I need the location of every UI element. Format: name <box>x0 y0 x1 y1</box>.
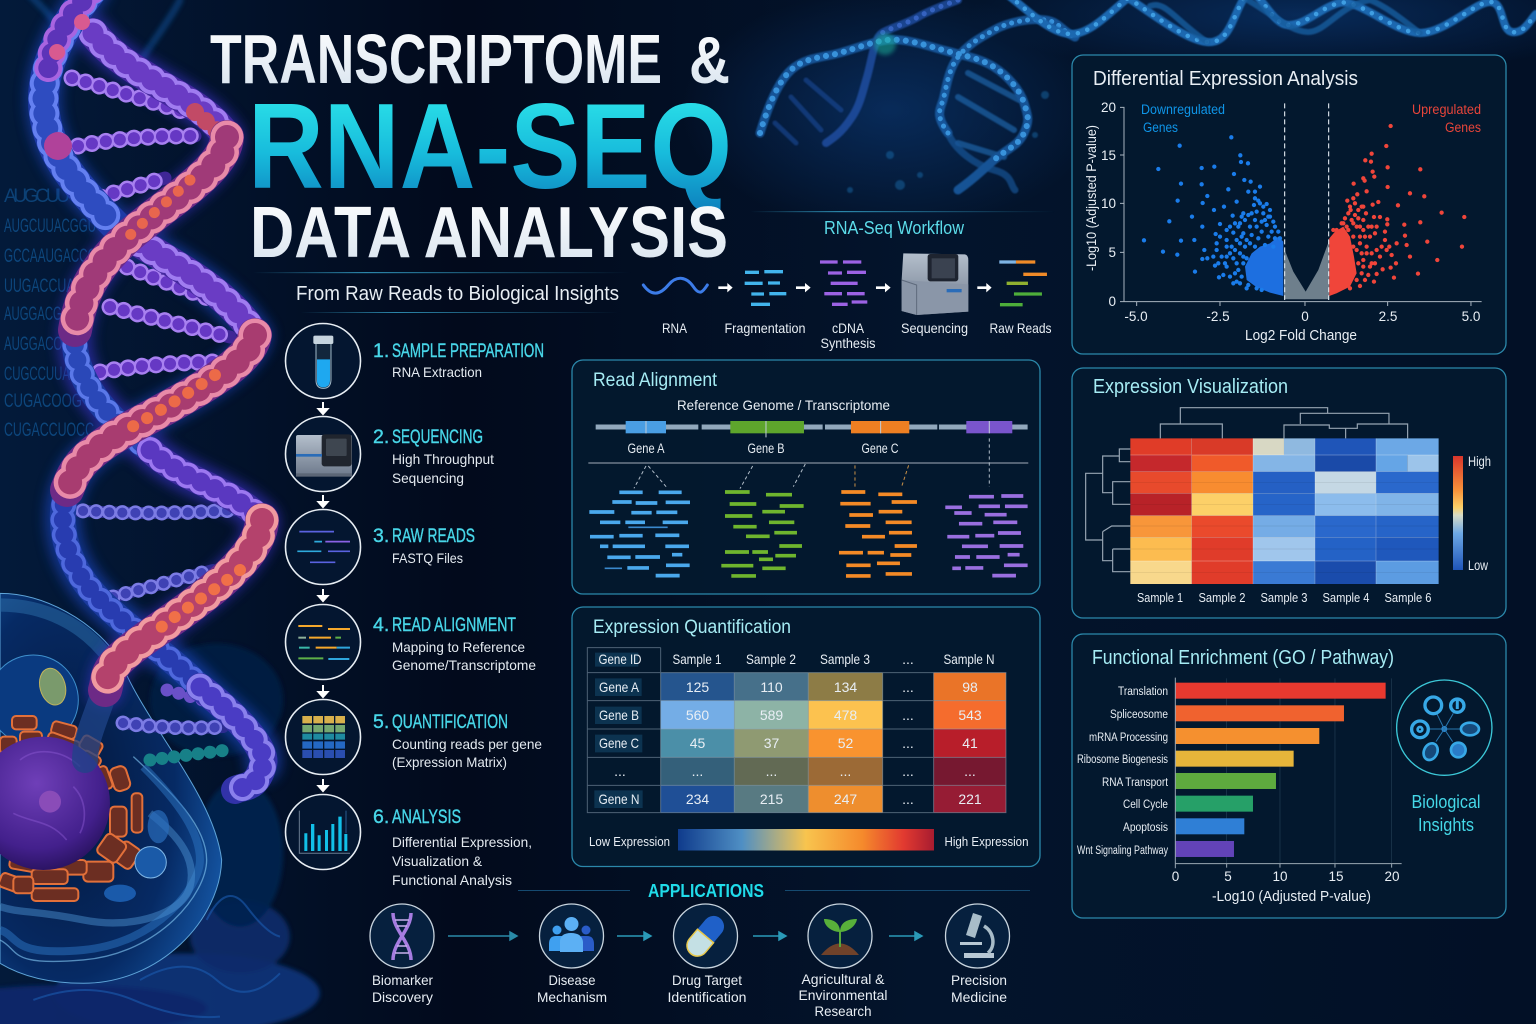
expression table: ... <box>902 791 914 807</box>
step 4: read alignment: READ ALIGNMENT <box>392 614 516 636</box>
step 5: quantification: 5. <box>373 711 389 733</box>
expression table: 125 <box>686 679 709 695</box>
applications <box>370 881 1030 1019</box>
volcano plot <box>1084 100 1482 344</box>
workflow heading: RNA-Seq Workflow <box>824 218 965 238</box>
background: RNA sequence letters: AUGCUUACGGU <box>4 216 96 237</box>
step 2: sequencing: 2. <box>373 426 389 448</box>
panel: read alignment: Gene C <box>862 441 899 456</box>
step 1: sample preparation <box>286 324 544 414</box>
expression table: Gene B <box>599 707 639 723</box>
volcano plot: 10 <box>1101 196 1116 211</box>
panel: read alignment: Gene B <box>748 441 784 456</box>
application: precision medicine: Precision <box>951 972 1007 988</box>
title <box>210 20 732 273</box>
illustration: DNA double helix <box>43 0 264 790</box>
expression table: 560 <box>686 707 709 723</box>
volcano plot: Log2 Fold Change <box>1245 328 1357 344</box>
biological insights label: Insights <box>1418 814 1474 835</box>
bar chart: -Log10 (Adjusted P-value) <box>1212 889 1371 905</box>
arrow <box>753 932 786 940</box>
background: RNA sequence letters: UUGACCUAG <box>4 276 84 297</box>
background: RNA sequence letters: CUGACCUOCC <box>4 420 94 441</box>
application: biomarker discovery: Biomarker <box>372 972 433 988</box>
step 2: sequencing: SEQUENCING <box>392 426 483 448</box>
expression table: Sample N <box>944 651 994 667</box>
step 6: analysis: Differential Expression, <box>392 834 532 850</box>
expression table: 247 <box>834 791 857 807</box>
step 5: quantification: Counting reads per gene <box>392 736 542 752</box>
step 6: analysis <box>286 794 532 888</box>
step 5: quantification <box>286 700 542 791</box>
application: drug target identification <box>668 904 746 1005</box>
panel: differential expression <box>1072 55 1506 354</box>
title: & <box>689 23 730 97</box>
expression table: Gene C <box>599 735 639 751</box>
bar chart <box>1077 678 1402 905</box>
volcano plot: 20 <box>1101 100 1116 115</box>
background: RNA sequence letters: AUGGACGU <box>4 304 70 325</box>
expression table: ... <box>902 707 914 723</box>
expression table: ... <box>902 735 914 751</box>
step 3: raw reads: 3. <box>373 525 389 547</box>
expression table: 110 <box>760 679 783 695</box>
panel: RNA-Seq workflow: cDNA <box>832 320 865 336</box>
expression table: Sample 2 <box>746 651 796 667</box>
step 1: sample preparation: RNA Extraction <box>392 364 482 380</box>
expression table: 221 <box>958 791 982 807</box>
title: DATA ANALYSIS <box>250 193 728 273</box>
panel: RNA-Seq workflow: RNA <box>662 320 688 336</box>
volcano plot: Upregulated <box>1412 102 1481 117</box>
step 3: raw reads: RAW READS <box>392 525 475 547</box>
heatmap: Low <box>1468 558 1488 573</box>
step 3: raw reads <box>286 510 475 601</box>
expression table: 134 <box>834 679 857 695</box>
bar chart: 5 <box>1224 869 1232 884</box>
volcano plot: -5.0 <box>1124 309 1148 324</box>
illustration: cell <box>0 593 320 1024</box>
heatmap: Sample 4 <box>1322 590 1370 605</box>
bar chart: Apoptosis <box>1123 822 1168 834</box>
arrow <box>448 932 517 940</box>
heatmap <box>1086 408 1491 605</box>
front pink strands <box>67 137 262 690</box>
expression table: 45 <box>690 735 705 751</box>
background: faint DNA helices top right <box>30 0 1536 230</box>
expression table: 478 <box>834 707 857 723</box>
title: TRANSCRIPTOME <box>210 20 662 98</box>
step 2: sequencing <box>286 416 494 507</box>
application: biomarker discovery <box>370 904 434 1005</box>
back strand segments <box>63 33 263 790</box>
expression legend: Low Expression <box>589 834 670 849</box>
application: precision medicine: Medicine <box>951 989 1007 1005</box>
heatmap: Sample 6 <box>1384 590 1432 605</box>
step 5: quantification: QUANTIFICATION <box>392 711 508 733</box>
background: RNA sequence letters: CUGACOOG <box>4 391 82 412</box>
expression table: ... <box>902 679 914 695</box>
applications heading: APPLICATIONS <box>648 881 764 901</box>
step 2: sequencing: Sequencing <box>392 470 464 486</box>
expression table: Sample 1 <box>672 651 722 667</box>
panel: read alignment: Reference Genome / Transcriptome <box>677 397 890 413</box>
application: disease mechanism <box>537 904 607 1005</box>
panel: RNA-Seq workflow: Synthesis <box>820 335 876 351</box>
step 4: read alignment: 4. <box>373 614 389 636</box>
enrichment heading: Functional Enrichment (GO / Pathway) <box>1092 647 1394 669</box>
expression table: 52 <box>838 735 853 751</box>
volcano plot: 0 <box>1301 309 1309 324</box>
heatmap: Sample 3 <box>1260 590 1308 605</box>
subtitle: From Raw Reads to Biological Insights <box>296 283 619 305</box>
expression legend <box>589 829 1028 850</box>
volcano heading: Differential Expression Analysis <box>1093 67 1358 90</box>
rungs <box>70 78 235 760</box>
bar chart: Cell Cycle <box>1123 799 1168 811</box>
bar chart: 10 <box>1272 869 1288 884</box>
biological insights label <box>1412 791 1480 835</box>
expression table: Sample 3 <box>820 651 870 667</box>
volcano plot: 5 <box>1108 245 1116 260</box>
expression table: 41 <box>962 735 978 751</box>
expression table: 215 <box>760 791 783 807</box>
background: RNA sequence letters: AUGGACOP <box>4 334 70 355</box>
volcano plot: 0 <box>1108 294 1116 309</box>
step 4: read alignment: Mapping to Reference <box>392 639 525 655</box>
expression table: ... <box>964 763 976 779</box>
step 6: analysis: Functional Analysis <box>392 872 512 888</box>
expression table: ... <box>692 763 703 779</box>
bar chart: Translation <box>1118 686 1168 698</box>
panel: RNA-Seq workflow: Fragmentation <box>724 320 806 336</box>
panel: functional enrichment <box>1072 634 1506 918</box>
volcano plot: Downregulated <box>1141 102 1225 117</box>
step 5: quantification: (Expression Matrix) <box>392 754 507 770</box>
heatmap: High <box>1468 454 1491 469</box>
expression table: ... <box>766 763 777 779</box>
expression table: Gene A <box>599 679 640 695</box>
application: drug target identification: Drug Target <box>672 972 742 988</box>
step 6: analysis: ANALYSIS <box>392 806 461 828</box>
title: RNA-SEQ <box>248 78 732 214</box>
expression table: ... <box>840 763 851 779</box>
expression table: Gene ID <box>598 651 642 667</box>
application: biomarker discovery: Discovery <box>372 989 433 1005</box>
expression table: Gene N <box>598 791 640 807</box>
quantification heading: Expression Quantification <box>593 617 791 638</box>
volcano plot: 15 <box>1101 148 1116 163</box>
application: precision medicine <box>946 904 1010 1005</box>
arrow <box>889 932 922 940</box>
bar chart: 15 <box>1328 869 1344 884</box>
application: disease mechanism: Disease <box>548 972 596 988</box>
step 1: sample preparation: SAMPLE PREPARATION <box>392 340 544 362</box>
panel: RNA-Seq workflow: Raw Reads <box>990 320 1052 336</box>
step 6: analysis: Visualization & <box>392 853 483 869</box>
expression legend: High Expression <box>944 834 1028 849</box>
expression table: 98 <box>962 679 978 695</box>
expression table: 37 <box>764 735 779 751</box>
heatmap: Sample 1 <box>1137 590 1183 605</box>
step 4: read alignment: Genome/Transcriptome <box>392 657 536 673</box>
panel: read alignment: Gene A <box>628 441 664 456</box>
bar chart: Wnt Signaling Pathway <box>1077 845 1168 857</box>
application: agricultural and environmental research: Environmental <box>798 987 888 1003</box>
expression table <box>587 648 1006 813</box>
panel: RNA-Seq workflow <box>643 218 1052 351</box>
colour scale <box>1453 456 1463 570</box>
step 6: analysis: 6. <box>373 806 389 828</box>
step 2: sequencing: High Throughput <box>392 451 494 467</box>
expression table: ... <box>614 763 626 779</box>
volcano plot: 2.5 <box>1379 309 1397 324</box>
background: RNA sequence letters: AUGCUU <box>4 186 70 207</box>
heatmap: Sample 2 <box>1198 590 1246 605</box>
panel: expression visualization <box>1072 368 1506 618</box>
bar chart: 0 <box>1172 869 1179 884</box>
volcano plot: -2.5 <box>1206 309 1230 324</box>
background: RNA sequence letters: CUGCCUUA <box>4 364 70 385</box>
step 4: read alignment <box>286 604 536 697</box>
application: drug target identification: Identification <box>668 989 746 1005</box>
step 1: sample preparation: 1. <box>373 340 389 362</box>
bar chart: RNA Transport <box>1102 777 1169 789</box>
application: agricultural and environmental research <box>798 904 888 1019</box>
bar chart: 20 <box>1384 869 1400 884</box>
application: disease mechanism: Mechanism <box>537 989 607 1005</box>
expression table: 543 <box>958 707 982 723</box>
arrow <box>617 932 651 940</box>
expression table: ... <box>902 763 914 779</box>
bar chart: Spliceosome <box>1110 709 1168 721</box>
bar chart: mRNA Processing <box>1089 732 1168 744</box>
background: RNA sequence letters <box>4 186 96 441</box>
expression table: 589 <box>760 707 783 723</box>
volcano plot: Genes <box>1143 120 1178 135</box>
volcano plot: 5.0 <box>1462 309 1480 324</box>
biological insights label: Biological <box>1412 791 1480 812</box>
volcano plot: Genes <box>1445 120 1481 135</box>
panel: expression quantification <box>572 607 1040 866</box>
heatmap heading: Expression Visualization <box>1093 376 1288 398</box>
panel: read alignment <box>572 360 1040 594</box>
read alignment heading: Read Alignment <box>593 370 718 391</box>
application: agricultural and environmental research: Research <box>814 1003 872 1019</box>
front left strand <box>43 0 115 225</box>
expression table: ... <box>902 651 914 667</box>
bar chart: Ribosome Biogenesis <box>1077 754 1168 766</box>
icon: biological insights <box>1397 680 1492 775</box>
expression table: 234 <box>686 791 709 807</box>
panel: RNA-Seq workflow: Sequencing <box>901 320 968 336</box>
application: agricultural and environmental research: Agricultural & <box>802 971 885 987</box>
background: RNA sequence letters: GCCAAUGACCC <box>4 246 96 267</box>
step 3: raw reads: FASTQ Files <box>392 550 463 566</box>
volcano plot: -Log10 (Adjusted P-value) <box>1084 125 1099 271</box>
